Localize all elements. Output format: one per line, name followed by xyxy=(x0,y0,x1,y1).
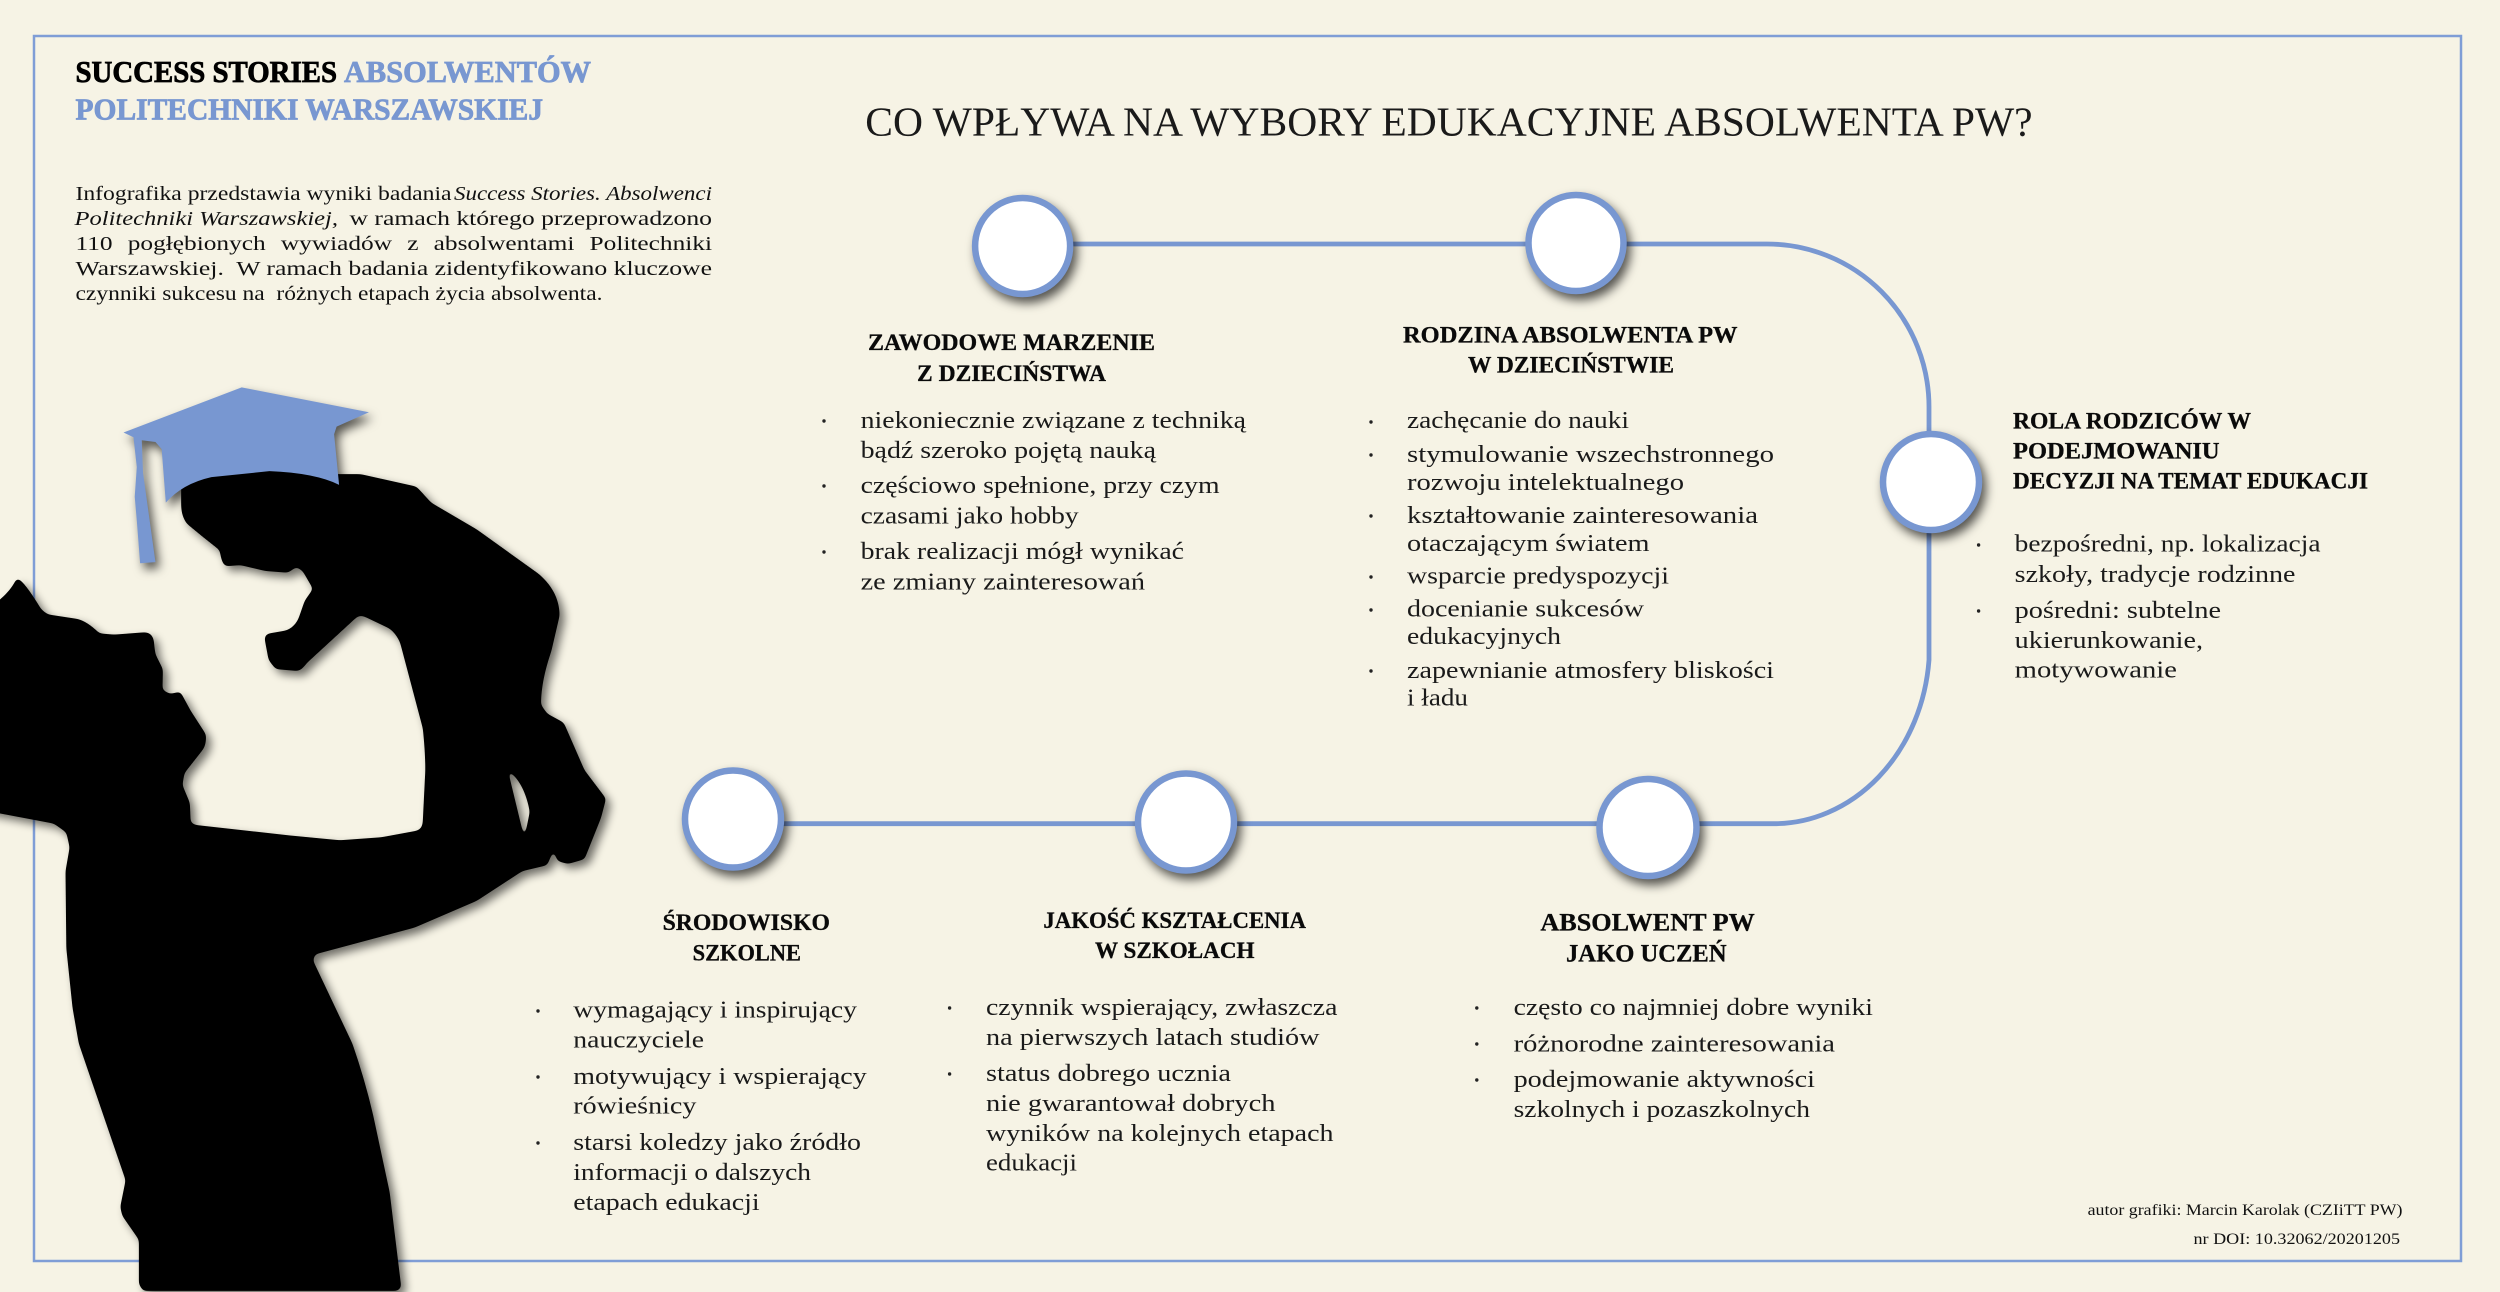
bullet list: rozwoju intelektualnego xyxy=(1407,469,1684,496)
bullet list xyxy=(1369,407,1774,712)
bullet list: docenianie sukcesów xyxy=(1407,595,1644,622)
bullet list: kształtowanie zainteresowania xyxy=(1407,502,1758,529)
bullet list xyxy=(822,407,1247,596)
bullet list: zachęcanie do nauki xyxy=(1407,407,1629,434)
intro text xyxy=(73,183,713,305)
node: jakość kształcenia xyxy=(1138,774,1234,870)
main heading: CO WPŁYWA NA WYBORY EDUKACYJNE ABSOLWENTA PW? xyxy=(865,99,2033,145)
bullet list: czynnik wspierający, zwłaszcza xyxy=(986,994,1338,1021)
bullet list: edukacyjnych xyxy=(1407,623,1561,650)
heading: PODEJMOWANIU xyxy=(2013,439,2220,465)
bullet list: informacji o dalszych xyxy=(573,1159,811,1186)
panel: zawodowe marzenie xyxy=(822,330,1247,596)
heading xyxy=(663,909,830,967)
credits xyxy=(2088,1202,2402,1248)
bullet list: pośredni: subtelne xyxy=(2015,597,2221,624)
bullet list: edukacji xyxy=(986,1150,1077,1177)
bullet list: wymagający i inspirujący xyxy=(573,997,858,1024)
intro text: czynniki sukcesu na różnych etapach życia absolwenta. xyxy=(76,283,602,305)
intro text: Warszawskiej. W ramach badania zidentyfikowano kluczowe xyxy=(76,258,712,280)
node: zawodowe marzenie xyxy=(975,198,1070,294)
panel: środowisko szkolne xyxy=(536,909,868,1216)
bullet list: brak realizacji mógł wynikać xyxy=(861,538,1184,565)
heading: ABSOLWENT PW xyxy=(1540,909,1755,936)
bullet list: na pierwszych latach studiów xyxy=(986,1024,1320,1051)
intro text: Success Stories. Absolwenci xyxy=(454,183,712,205)
credits: nr DOI: 10.32062/20201205 xyxy=(2194,1231,2400,1248)
bullet list: ze zmiany zainteresowań xyxy=(861,569,1145,596)
title block xyxy=(76,54,591,126)
heading xyxy=(1043,907,1306,964)
bullet list: i ładu xyxy=(1407,685,1468,712)
intro text: Infografika przedstawia wyniki badania xyxy=(76,183,452,205)
bullet list: szkolnych i pozaszkolnych xyxy=(1514,1096,1810,1123)
panel: jakość kształcenia xyxy=(948,907,1338,1177)
heading: SZKOLNE xyxy=(693,941,801,967)
heading: Z DZIECIŃSTWA xyxy=(917,361,1106,387)
credits: autor grafiki: Marcin Karolak (CZIiTT PW) xyxy=(2088,1202,2402,1219)
node: rola rodziców xyxy=(1883,434,1979,530)
panel: rola rodziców xyxy=(1977,408,2368,684)
bullet list: ukierunkowanie, xyxy=(2015,627,2203,654)
silhouette: parent lifting child xyxy=(0,470,606,1291)
heading: W SZKOŁACH xyxy=(1095,938,1254,964)
title block: POLITECHNIKI WARSZAWSKIEJ xyxy=(76,92,543,126)
heading: JAKOŚĆ KSZTAŁCENIA xyxy=(1043,907,1306,934)
heading: ZAWODOWE MARZENIE xyxy=(868,330,1155,356)
intro text: w ramach którego przeprowadzono xyxy=(350,208,712,230)
intro text: 110 pogłębionych wywiadów z absolwentami Politechniki xyxy=(76,233,713,255)
heading: DECYZJI NA TEMAT EDUKACJI xyxy=(2013,469,2368,495)
bullet list: często co najmniej dobre wyniki xyxy=(1514,994,1873,1021)
bullet list: rówieśnicy xyxy=(573,1093,697,1120)
node: środowisko szkolne xyxy=(685,770,781,868)
title block: ABSOLWENTÓW xyxy=(344,54,591,89)
heading xyxy=(868,330,1155,387)
bullet list: podejmowanie aktywności xyxy=(1514,1066,1815,1093)
bullet list: starsi koledzy jako źródło xyxy=(573,1129,861,1156)
node: absolwent jako uczeń xyxy=(1600,779,1696,876)
heading xyxy=(1403,322,1738,378)
bullet list: zapewnianie atmosfery bliskości xyxy=(1407,657,1774,684)
panel: rodzina absolwenta xyxy=(1369,322,1774,712)
bullet list: bądź szeroko pojętą nauką xyxy=(861,437,1157,464)
bullet list: nie gwarantował dobrych xyxy=(986,1090,1276,1117)
heading: ROLA RODZICÓW W xyxy=(2013,408,2251,435)
bullet list: wsparcie predyspozycji xyxy=(1407,563,1669,590)
bullet list: niekoniecznie związane z techniką xyxy=(861,407,1247,434)
bullet list: motywowanie xyxy=(2015,657,2177,684)
bullet list xyxy=(536,997,868,1216)
heading: JAKO UCZEŃ xyxy=(1566,940,1727,968)
bullet list: motywujący i wspierający xyxy=(573,1063,868,1090)
bullet list: czasami jako hobby xyxy=(861,503,1079,530)
bullet list: etapach edukacji xyxy=(573,1189,760,1216)
bullet list: częściowo spełnione, przy czym xyxy=(861,472,1220,499)
bullet list: bezpośredni, np. lokalizacja xyxy=(2015,531,2321,558)
bullet list: wyników na kolejnych etapach xyxy=(986,1120,1334,1147)
heading xyxy=(1540,909,1755,968)
bullet list xyxy=(948,994,1338,1177)
bullet list: różnorodne zainteresowania xyxy=(1514,1030,1835,1057)
heading: RODZINA ABSOLWENTA PW xyxy=(1403,322,1738,348)
heading: W DZIECIŃSTWIE xyxy=(1468,352,1674,378)
bullet list: stymulowanie wszechstronnego xyxy=(1407,441,1774,468)
title block: SUCCESS STORIES xyxy=(76,54,337,89)
icon: graduation cap xyxy=(124,387,369,563)
node: rodzina absolwenta xyxy=(1528,195,1624,291)
bullet list: otaczającym światem xyxy=(1407,530,1650,557)
panel: absolwent jako uczeń xyxy=(1475,909,1873,1123)
connector path xyxy=(733,244,1929,824)
bullet list: szkoły, tradycje rodzinne xyxy=(2015,561,2296,588)
bullet list xyxy=(1475,994,1873,1123)
heading: ŚRODOWISKO xyxy=(663,909,830,936)
intro text: Politechniki Warszawskiej, xyxy=(73,208,338,230)
bullet list xyxy=(1977,531,2321,684)
bullet list: status dobrego ucznia xyxy=(986,1060,1231,1087)
bullet list: nauczyciele xyxy=(573,1027,704,1054)
heading xyxy=(2013,408,2368,495)
